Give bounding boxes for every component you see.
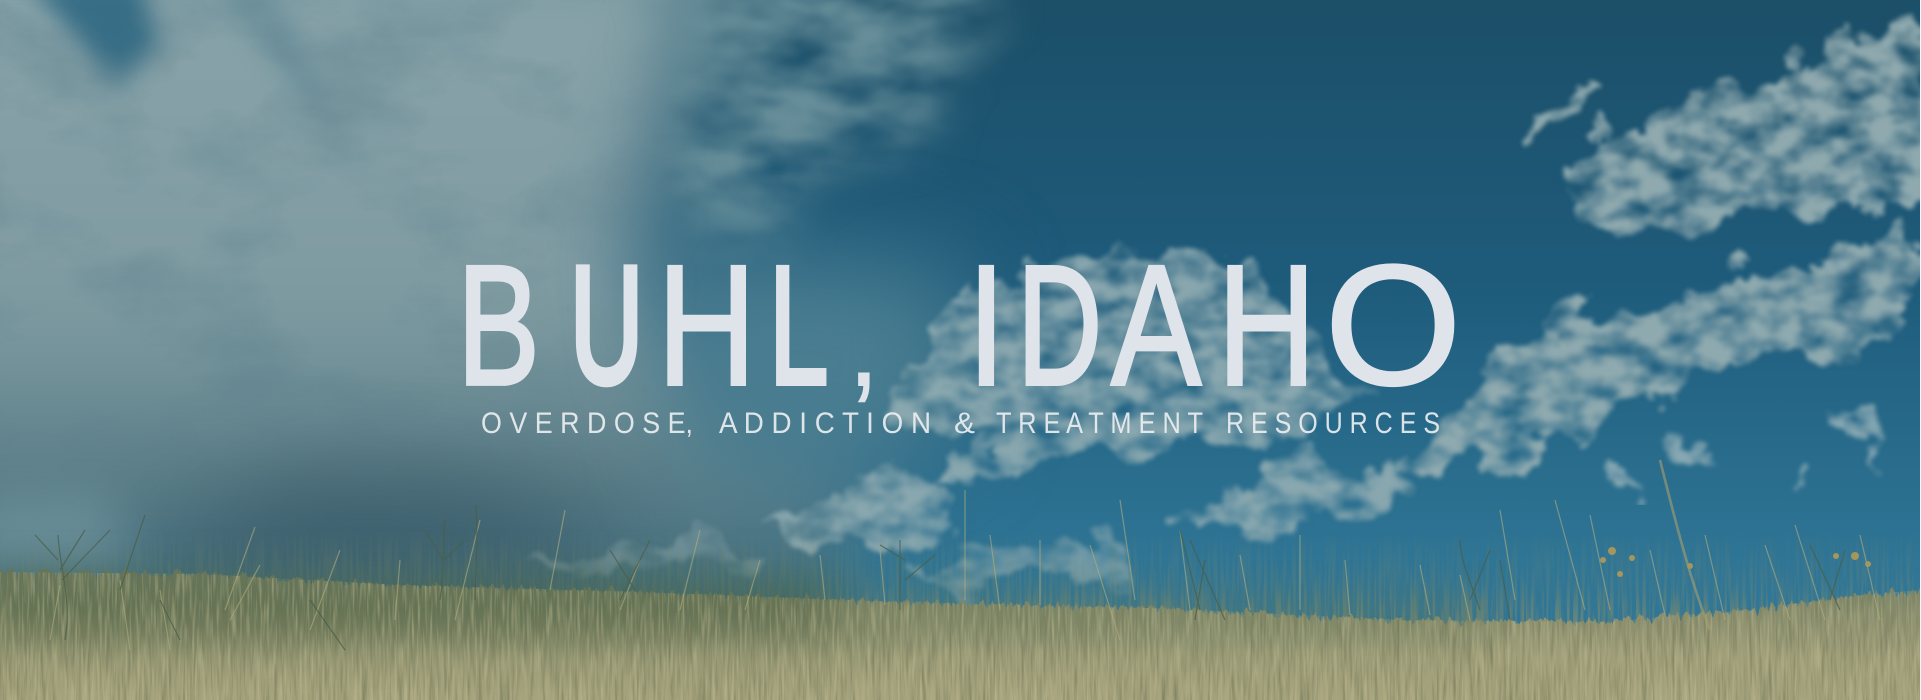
title: BUHL, IDAHO: U [570, 232, 643, 417]
title: BUHL, IDAHO: O [1325, 229, 1461, 421]
title: BUHL, IDAHO: L [769, 230, 828, 419]
subtitle: OVERDOSE, ADDICTION & TREATMENT RESOURCES: & [954, 407, 975, 440]
title: BUHL, IDAHO: H [1218, 229, 1316, 421]
subtitle: OVERDOSE, ADDICTION & TREATMENT RESOURCES: A D D I C T I O N [719, 407, 931, 440]
title: BUHL, IDAHO: A [1111, 229, 1201, 421]
subtitle: OVERDOSE, ADDICTION & TREATMENT RESOURCES [481, 407, 1440, 440]
subtitle: OVERDOSE, ADDICTION & TREATMENT RESOURCES: O V E R D O S E, [481, 407, 693, 440]
image right edge highlight [1920, 0, 1921, 700]
cloud: upper right bank [1400, 30, 1921, 465]
subtitle: OVERDOSE, ADDICTION & TREATMENT RESOURCES: T R E A T M E N T [996, 407, 1203, 440]
title: BUHL, IDAHO: , [847, 273, 880, 414]
grass field [0, 560, 1921, 700]
cloud: central cumulus behind the title [520, 248, 1432, 585]
title: BUHL, IDAHO [457, 228, 1461, 424]
title: BUHL, IDAHO: D [1018, 231, 1102, 420]
subtitle: OVERDOSE, ADDICTION & TREATMENT RESOURCES: R E S O U R C E S [1226, 407, 1440, 440]
seed heads on tall weeds [1600, 547, 1871, 577]
title: BUHL, IDAHO: H [658, 229, 756, 421]
title: BUHL, IDAHO: I [964, 228, 1009, 424]
title: BUHL, IDAHO: B [457, 229, 540, 421]
grass blades: dark weeds [35, 505, 1845, 650]
grass blades: pale stems [50, 460, 1880, 650]
cloud: large storm cloud on the left [0, 0, 1010, 590]
grass fringe along the horizon [116, 550, 1920, 627]
cloud: small scattered clouds lower right [1610, 415, 1885, 490]
